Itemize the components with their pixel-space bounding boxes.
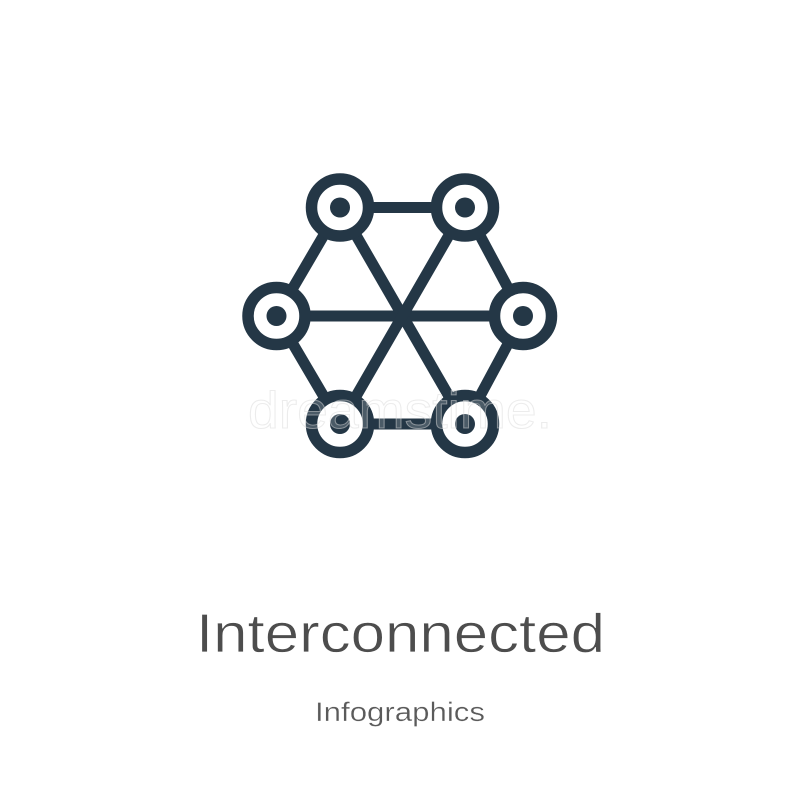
network nodes [248, 179, 552, 452]
title: Interconnected [196, 603, 605, 664]
subtitle: Infographics [315, 697, 485, 727]
watermark: dreamstime. [248, 382, 552, 440]
icon: interconnected network [248, 179, 552, 452]
connecting lines [276, 208, 523, 424]
